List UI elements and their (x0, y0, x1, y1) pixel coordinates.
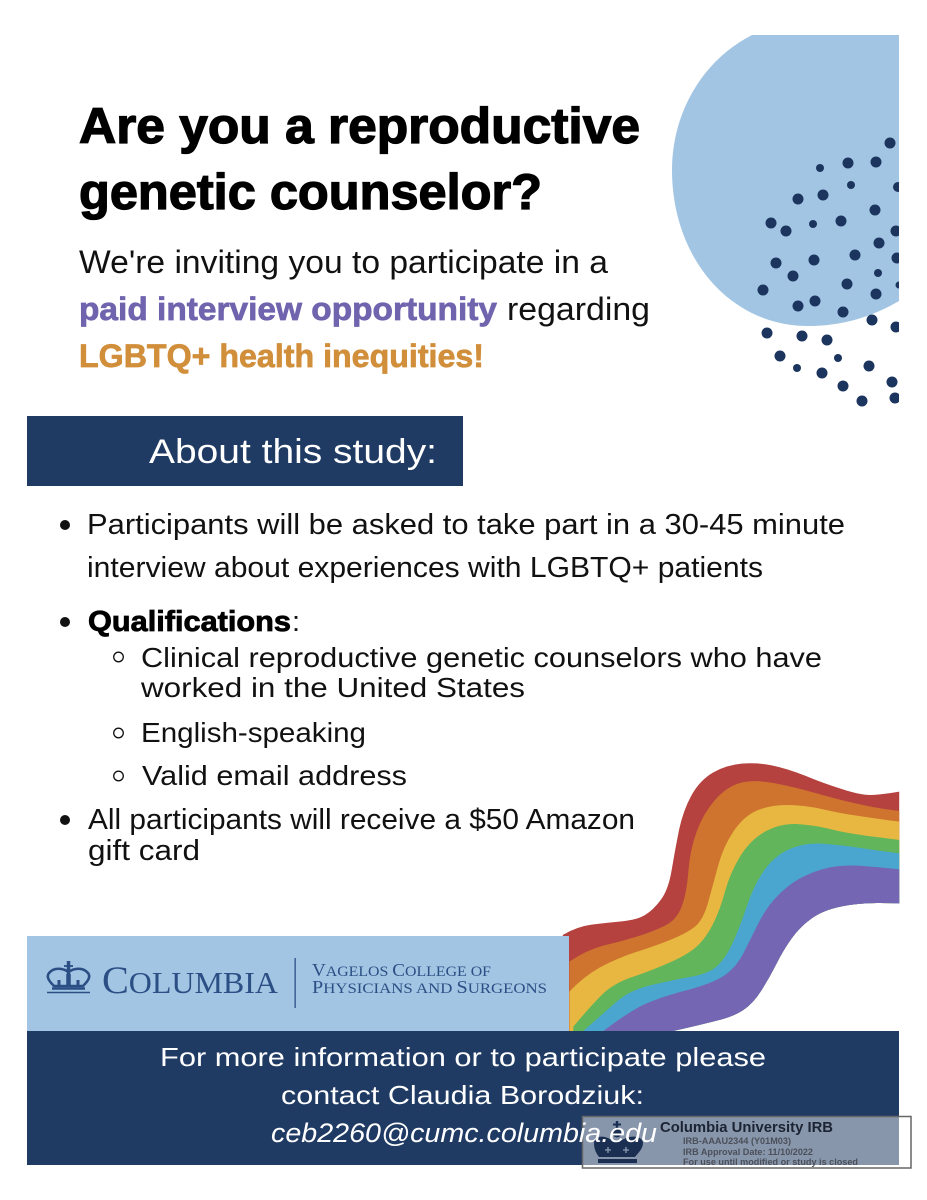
bullet: interview: Participants will be asked to take part in a 30-45 minute (87, 509, 845, 541)
title (79, 98, 640, 220)
bullet: gift card (60, 804, 635, 867)
bullet: qualifications: Qualifications (88, 606, 291, 638)
intro text: paid interview opportunity (79, 291, 497, 327)
panel: contact footer (27, 1031, 899, 1165)
panel: Columbia logo band (27, 936, 569, 1032)
intro text: regarding (507, 291, 650, 327)
bullet: gift card: gift card (88, 835, 200, 867)
IRB details (683, 1136, 858, 1168)
bullet: qualifications: : (292, 606, 300, 638)
bullet: interview (60, 509, 845, 584)
icon: IRB crown (594, 1121, 643, 1163)
college name: VAGELOS COLLEGE OF (312, 960, 491, 980)
sub-bullet: clinical: worked in the United States (140, 672, 525, 703)
email address: ceb2260@cumc.columbia.edu (271, 1118, 657, 1148)
rainbow wave (562, 763, 900, 1031)
IRB heading: Columbia University IRB (660, 1119, 833, 1136)
sub-bullet: english: English-speaking (141, 717, 366, 748)
IRB details: IRB-AAAU2344 (Y01M03) (683, 1136, 791, 1147)
navy dot cluster (758, 138, 903, 406)
bullet: interview: interview about experiences with LGBTQ+ patients (87, 552, 763, 584)
bullet: gift card: All participants will receive a $50 Amazon (88, 804, 635, 836)
sub-bullet: clinical: Clinical reproductive genetic counselors who have (141, 642, 822, 673)
light blue circle (672, 35, 899, 326)
college name (312, 960, 547, 997)
decorative blue circle with dots (672, 35, 903, 406)
IRB details: For use until modified or study is closed (683, 1157, 858, 1168)
logo wordmark: COLUMBIA (102, 959, 279, 1002)
IRB approval stamp (582, 1116, 911, 1168)
contact text: For more information or to participate please (160, 1042, 766, 1072)
IRB details: IRB Approval Date: 11/10/2022 (683, 1147, 813, 1158)
title: genetic counselor? (79, 164, 542, 220)
study details list (60, 509, 845, 867)
college name: PHYSICIANS AND SURGEONS (312, 977, 547, 997)
heading bar: about this study (27, 416, 463, 486)
icon: Columbia crown (47, 961, 90, 992)
heading bar: about this study: About this study: (149, 433, 437, 471)
intro text (79, 244, 650, 374)
panel: contact footer: contact Claudia Borodziuk: (281, 1080, 644, 1110)
sub-bullet: email: Valid email address (142, 760, 407, 791)
intro text: LGBTQ+ health inequities! (79, 338, 484, 374)
sub-bullet: clinical (114, 642, 822, 703)
title: Are you a reproductive (79, 98, 640, 154)
intro text: We're inviting you to participate in a (79, 244, 608, 280)
